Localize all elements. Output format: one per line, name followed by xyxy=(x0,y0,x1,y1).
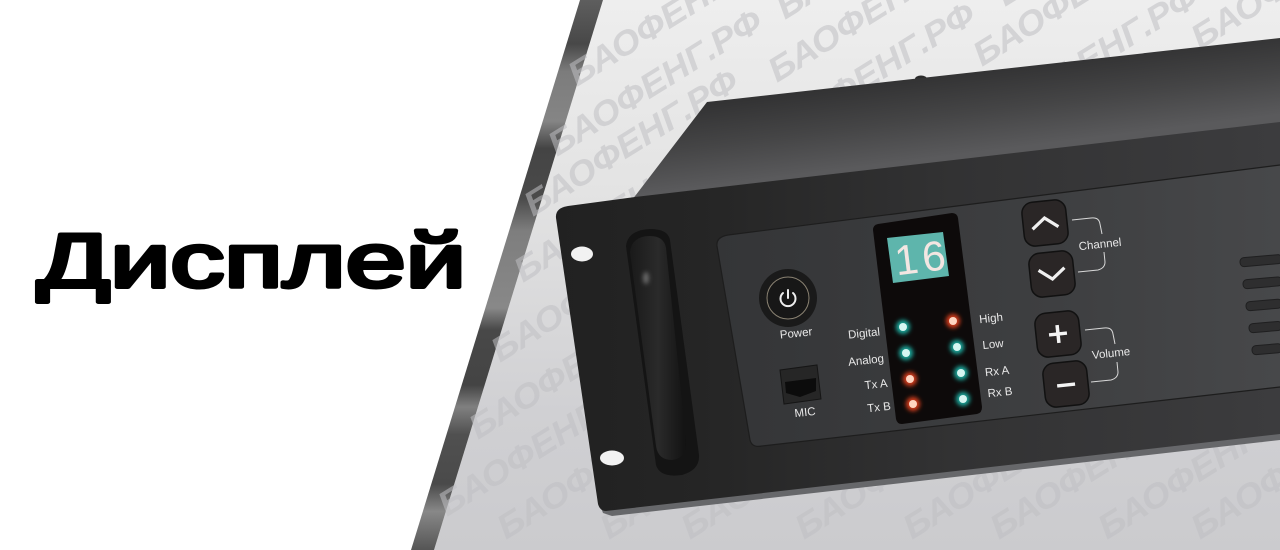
status leds xyxy=(896,314,970,411)
watermark text: БАОФЕНГ.РФ xyxy=(593,384,821,547)
channel bracket xyxy=(1072,218,1105,272)
power button xyxy=(759,269,817,327)
led labels xyxy=(848,312,1013,415)
handle xyxy=(626,229,699,476)
led labels: Digital xyxy=(848,326,881,342)
volume minus button xyxy=(1042,360,1090,408)
channel screen: 16 xyxy=(892,231,952,284)
watermark text: БАОФЕНГ.РФ xyxy=(541,1,769,164)
led: low xyxy=(950,340,964,354)
watermark text: БАОФЕНГ.РФ xyxy=(490,384,718,547)
watermark text: БАОФЕНГ.РФ xyxy=(896,384,1124,547)
watermark text: БАОФЕНГ.РФ xyxy=(484,207,712,370)
led labels: Tx B xyxy=(867,401,892,415)
panel outline xyxy=(717,165,1280,446)
watermark text: БАОФЕНГ.РФ xyxy=(788,384,1016,547)
led: analog xyxy=(899,346,913,360)
volume plus button xyxy=(1034,310,1082,358)
watermark text: БАОФЕНГ.РФ xyxy=(517,61,745,224)
watermark text: БАОФЕНГ.РФ xyxy=(983,384,1211,547)
mounting hole top xyxy=(571,246,593,262)
mic port xyxy=(780,365,821,404)
led labels: Rx B xyxy=(987,386,1013,400)
radio device xyxy=(556,38,1280,516)
led labels: High xyxy=(979,312,1003,326)
led labels: Analog xyxy=(848,353,885,369)
led: tx a xyxy=(903,372,917,386)
device front plate xyxy=(556,122,1280,511)
power label: Power xyxy=(779,326,813,342)
watermark text: БАОФЕНГ.РФ xyxy=(754,0,982,157)
device bottom edge xyxy=(600,425,1280,516)
recessed control panel xyxy=(717,165,1280,446)
led: rx a xyxy=(954,366,968,380)
diagonal stripe xyxy=(411,0,603,550)
device top knob xyxy=(915,76,927,82)
channel down button xyxy=(1028,250,1076,298)
led labels: Low xyxy=(982,338,1005,352)
mic label: MIC xyxy=(794,406,816,420)
vent slots xyxy=(1240,254,1280,355)
led: tx b xyxy=(906,397,920,411)
watermark text: БАОФЕНГ.РФ xyxy=(507,127,735,290)
display column xyxy=(873,213,982,424)
led: high xyxy=(946,314,960,328)
led labels: Rx A xyxy=(984,365,1010,379)
volume label: Volume xyxy=(1091,346,1131,362)
watermark text: БАОФЕНГ.РФ xyxy=(674,384,902,547)
channel label: Channel xyxy=(1078,237,1122,253)
title: Дисплей xyxy=(37,219,466,304)
watermark text xyxy=(431,0,1280,547)
channel up button xyxy=(1021,199,1069,247)
mounting hole bottom xyxy=(600,450,624,466)
watermark text: БАОФЕНГ.РФ xyxy=(462,284,690,447)
volume bracket xyxy=(1085,328,1118,382)
grey right background xyxy=(434,0,1280,550)
watermark text: БАОФЕНГ.РФ xyxy=(431,361,659,524)
led labels: Tx A xyxy=(864,378,888,392)
led: digital xyxy=(896,320,910,334)
device top face xyxy=(632,38,1280,200)
led: rx b xyxy=(956,392,970,406)
